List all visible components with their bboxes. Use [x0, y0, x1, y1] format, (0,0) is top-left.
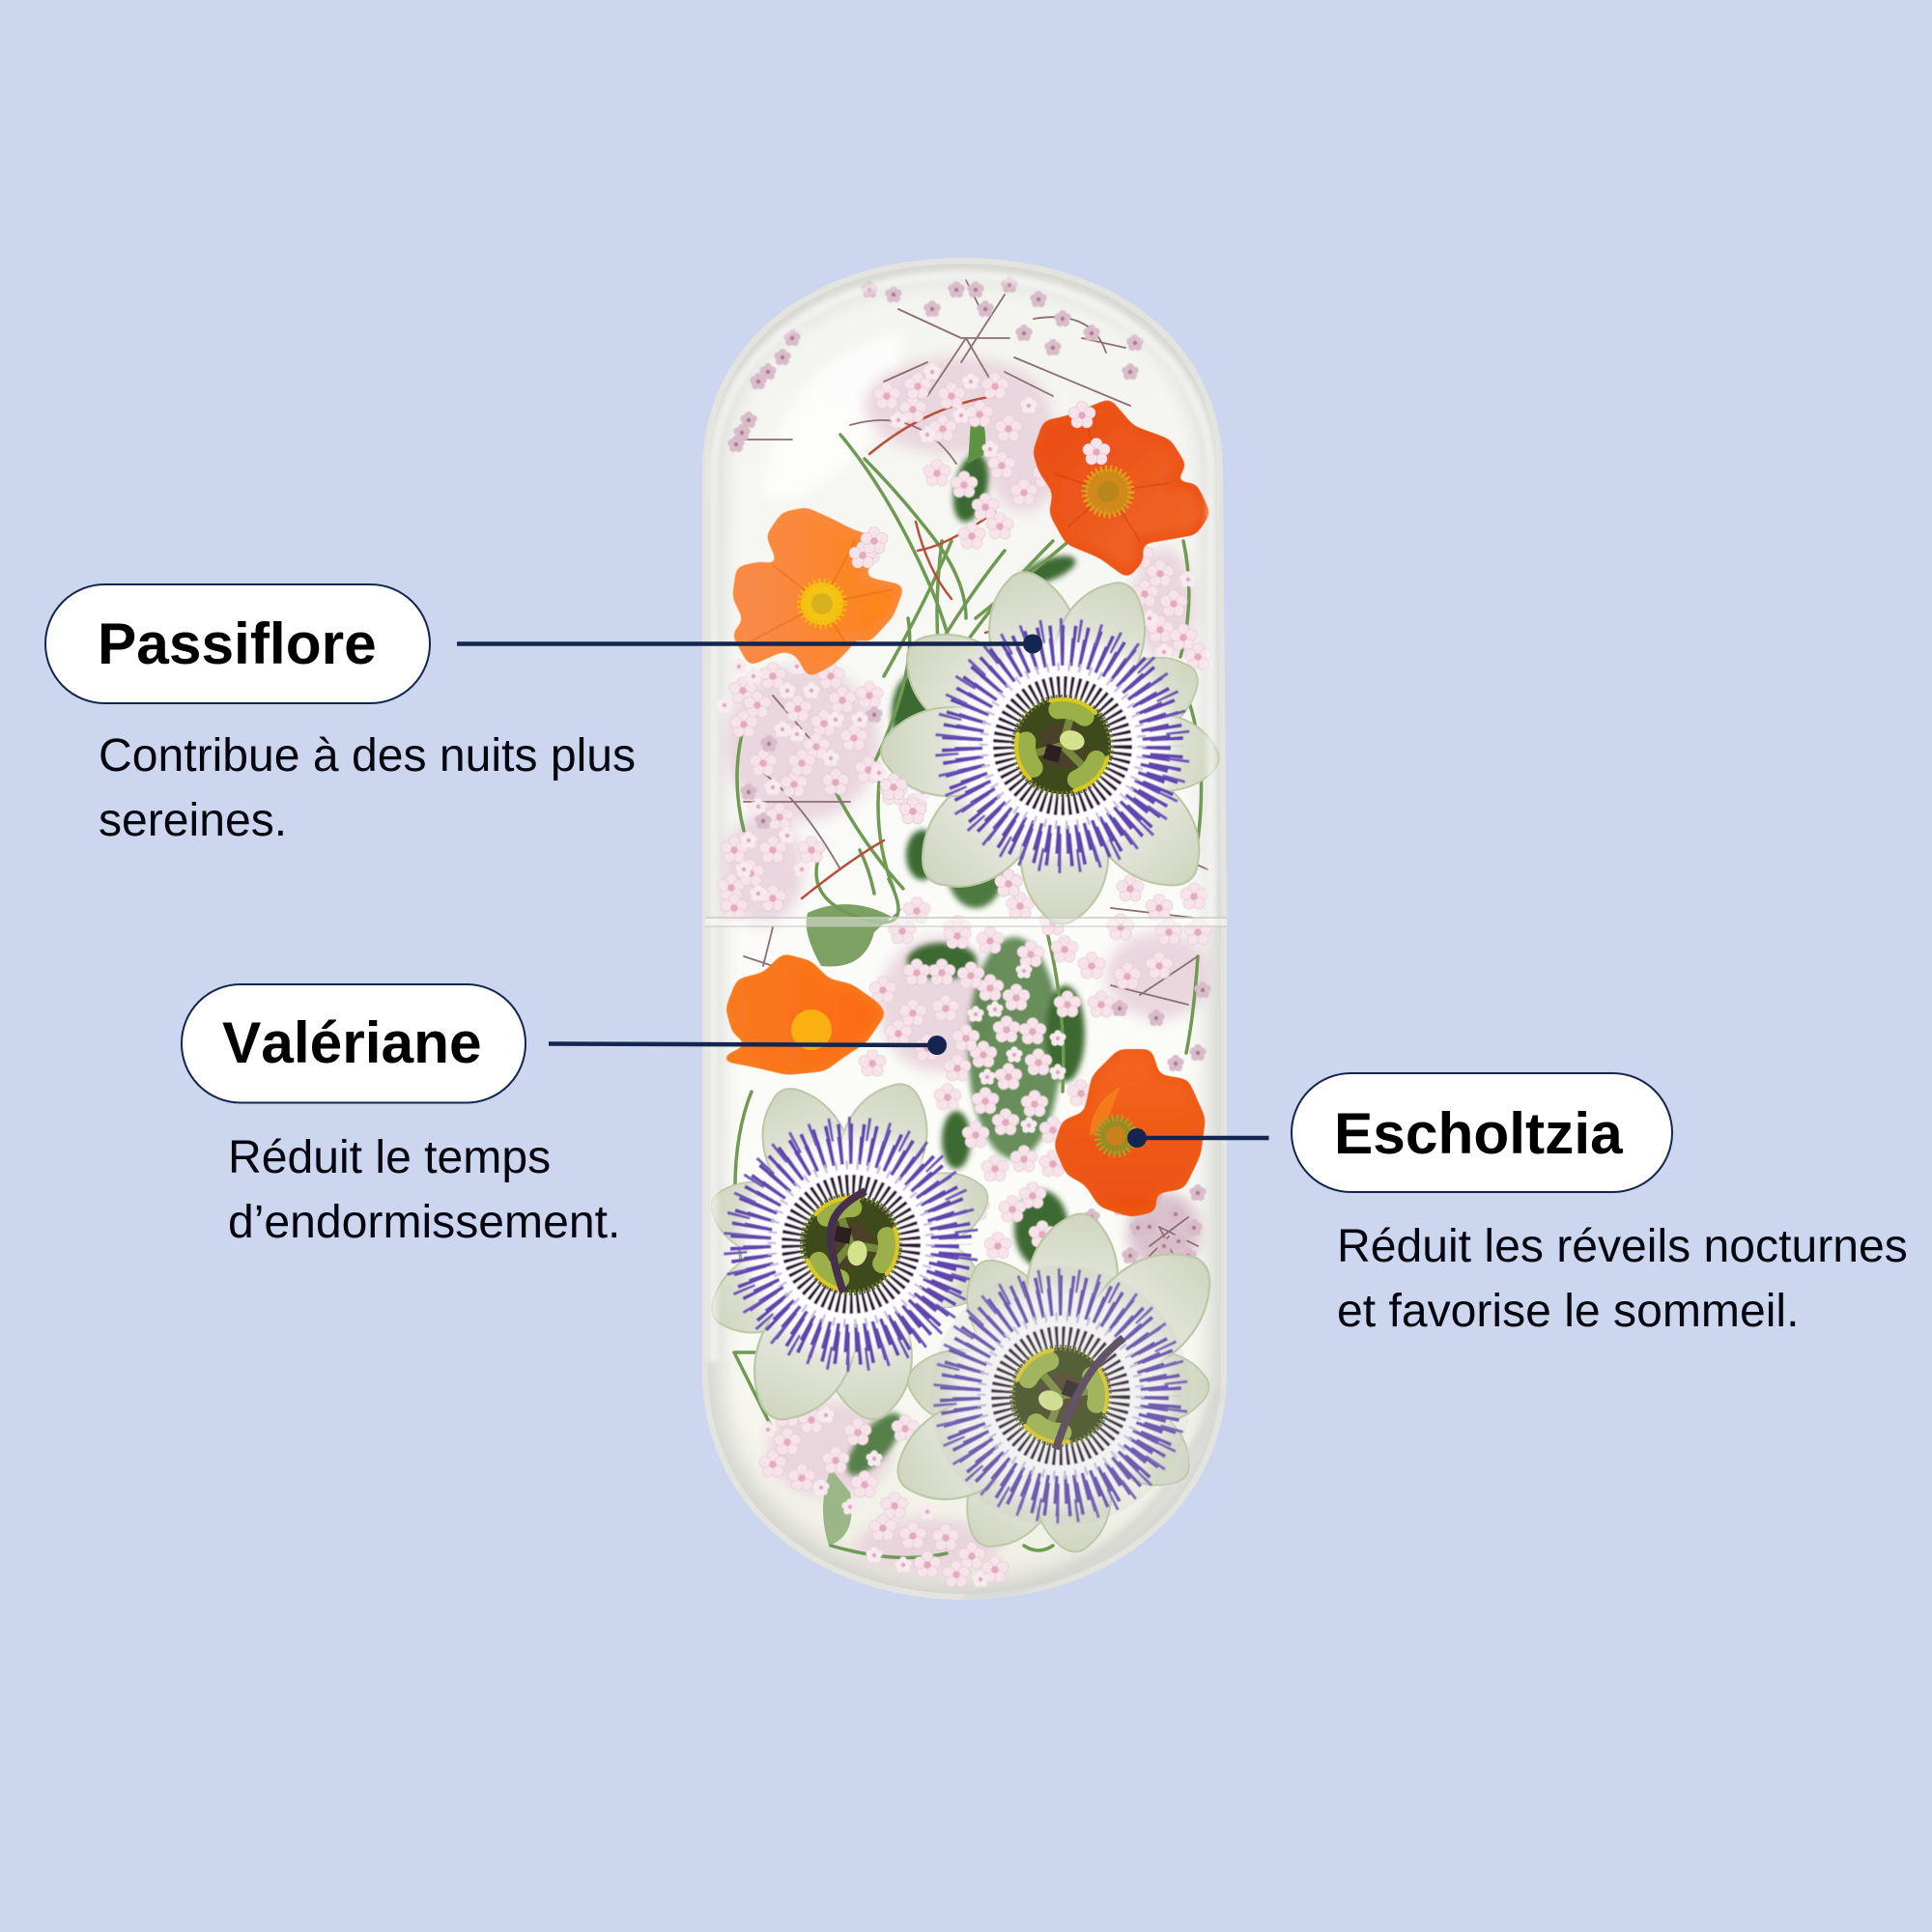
pink haze [723, 357, 1212, 1573]
leaves [807, 417, 985, 1546]
passion flower: lower left [696, 1071, 999, 1437]
orange flower: escholtzia [1057, 1052, 1203, 1214]
glass rim and seam [702, 258, 1227, 1600]
capsule illustration [696, 258, 1234, 1600]
twigs [734, 280, 1208, 1265]
heading: Escholtzia [1334, 1100, 1623, 1166]
orange flower: lower left [724, 956, 883, 1072]
label: Passiflore [45, 584, 636, 846]
description: Contribue à des nuits plus [99, 729, 636, 781]
pointer: Valériane [549, 1036, 947, 1055]
label: Valériane [182, 984, 620, 1248]
passion flower: lower right [880, 1209, 1234, 1565]
description: sereines. [99, 794, 287, 846]
heading: Valériane [222, 1009, 482, 1075]
description: et favorise le sommeil. [1337, 1285, 1799, 1337]
dark foliage [838, 450, 1085, 1484]
pointer: Escholtzia [1127, 1128, 1269, 1148]
pointer: Passiflore [457, 634, 1042, 653]
glass highlight [763, 333, 903, 499]
orange flower: top right [1037, 403, 1207, 574]
passion flower: top [879, 562, 1226, 924]
pill [182, 984, 526, 1103]
pink florets over flowers [849, 402, 1110, 896]
orange flower: top left [735, 510, 901, 674]
description: d’endormissement. [228, 1196, 620, 1248]
pill [1292, 1073, 1672, 1192]
description: Réduit le temps [228, 1131, 551, 1183]
capsule body [702, 258, 1227, 1600]
heading: Passiflore [98, 611, 377, 676]
description: Réduit les réveils nocturnes [1337, 1220, 1908, 1272]
pink flower clusters [716, 276, 1211, 1587]
pill [45, 584, 430, 703]
label: Escholtzia [1292, 1073, 1908, 1337]
stems [734, 435, 1202, 1557]
